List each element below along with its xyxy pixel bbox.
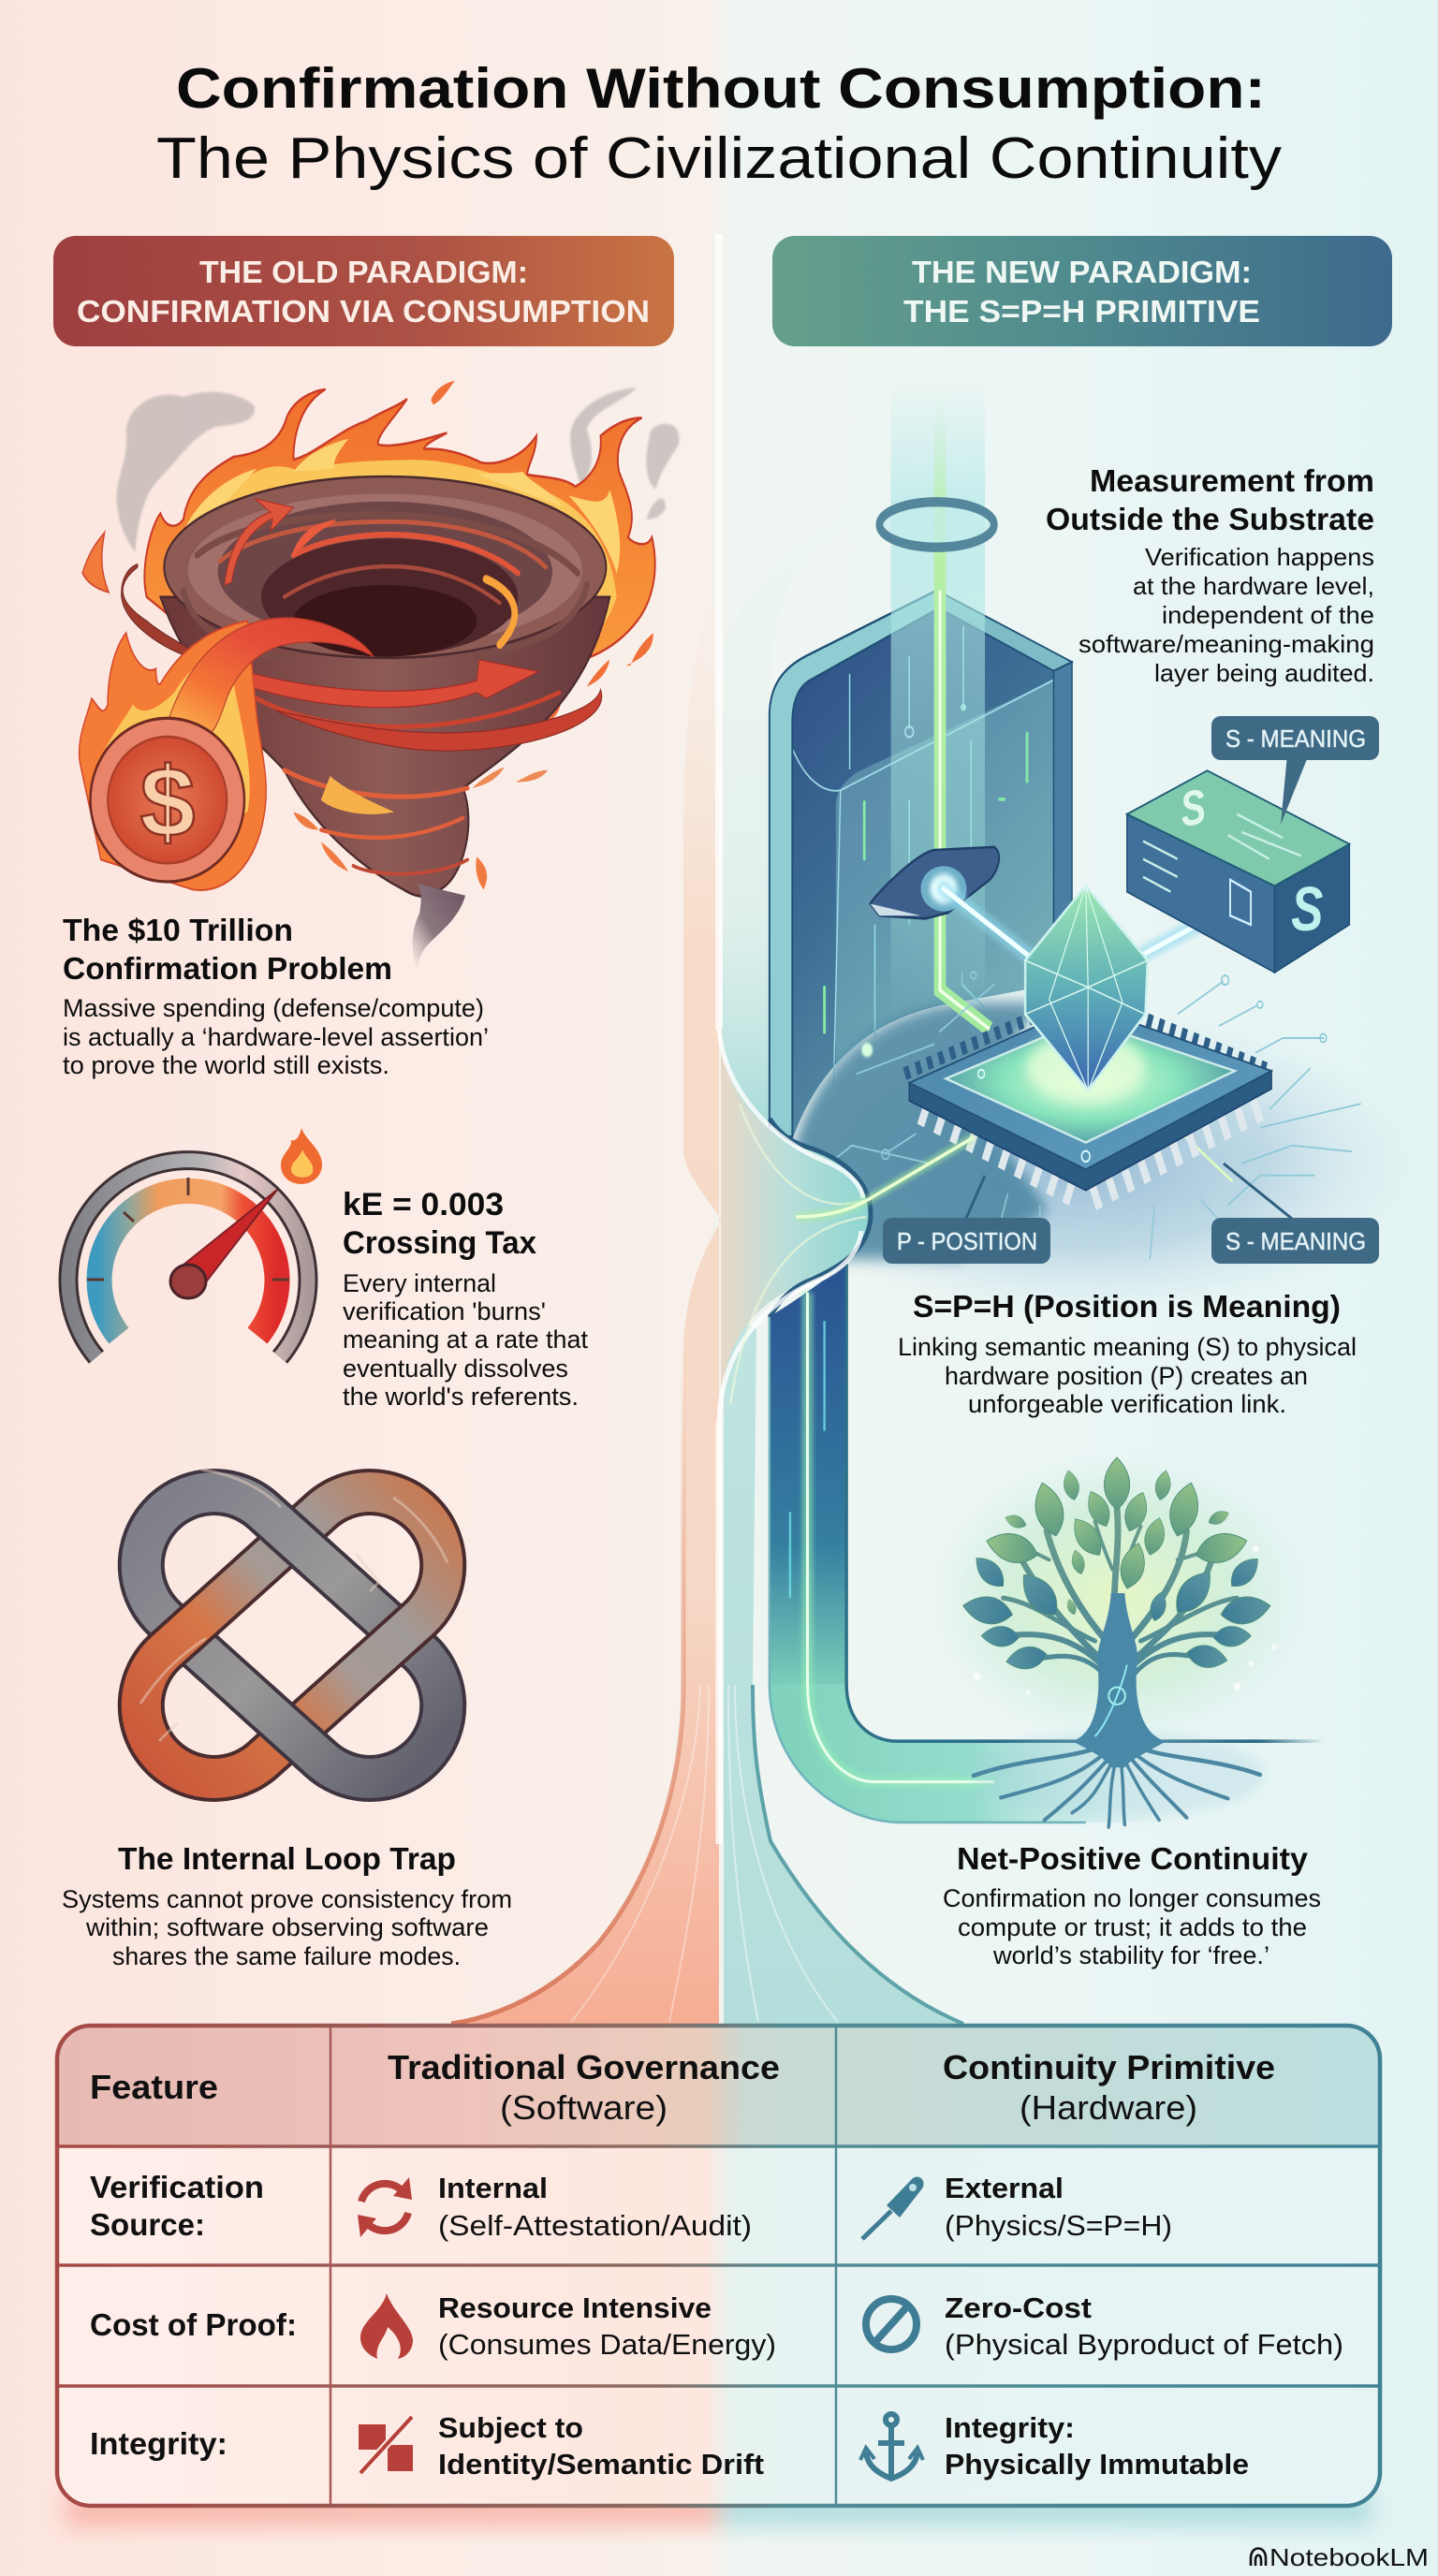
leaves: [961, 1457, 1272, 1673]
icon: crossing tax gauge: [68, 1128, 322, 1357]
row: verification source: (Physics/S=P=H): [945, 2209, 1172, 2242]
icon: semantic drift: [359, 2417, 413, 2473]
text: net-positive continuity: Net-Positive Continuity: [957, 1841, 1309, 1876]
measurement beams: [944, 889, 1244, 958]
text: measurement from outside the substrate: layer being audited.: [1154, 659, 1374, 687]
header: old paradigm: THE OLD PARADIGM:: [199, 255, 528, 289]
text: S=P=H position is meaning: S=P=H (Position is Meaning): [913, 1289, 1341, 1324]
row: cost of proof: Cost of Proof:: [90, 2307, 297, 2342]
text: internal loop trap: Systems cannot prove consistency from: [62, 1885, 512, 1913]
text: measurement from outside the substrate: Verification happens: [1145, 543, 1374, 571]
text: crossing tax: the world's referents.: [343, 1383, 579, 1411]
text: net-positive continuity: compute or trust; it adds to the: [958, 1913, 1307, 1941]
row: verification source: External: [945, 2172, 1064, 2204]
text: internal loop trap: [62, 1841, 512, 1970]
icon: burning tornado with dollar coin: [80, 381, 680, 969]
central stream dividing the two paradigms: [451, 234, 963, 2024]
microchip: [904, 996, 1271, 1199]
sensor eye: [871, 847, 999, 918]
header: new paradigm: THE S=P=H PRIMITIVE: [903, 294, 1260, 329]
header row: Continuity Primitive: [943, 2048, 1275, 2086]
title: The Physics of Civilizational Continuity: [156, 126, 1282, 191]
NotebookLM brand mark: NotebookLM: [1269, 2543, 1429, 2571]
header row: [90, 2048, 1275, 2127]
row: verification source: Source:: [90, 2207, 205, 2242]
text: S=P=H position is meaning: Linking semantic meaning (S) to physical: [898, 1333, 1357, 1361]
text: measurement from outside the substrate: Outside the Substrate: [1046, 502, 1374, 536]
title: Confirmation Without Consumption:: [176, 57, 1266, 120]
text: measurement from outside the substrate: Measurement from: [1090, 463, 1374, 498]
text: net-positive continuity: world’s stability for ‘free.’: [992, 1941, 1269, 1969]
text: net-positive continuity: [943, 1841, 1321, 1969]
title: [156, 57, 1282, 191]
row: verification source: Internal: [438, 2172, 548, 2204]
icon: small flame at gauge tip: [281, 1128, 322, 1184]
header: new paradigm: THE NEW PARADIGM:: [912, 255, 1252, 289]
text: $10 trillion problem: to prove the world still exists.: [63, 1051, 389, 1079]
text: $10 trillion problem: Confirmation Problem: [63, 951, 392, 986]
text: crossing tax: eventually dissolves: [343, 1354, 568, 1383]
text: $10 trillion problem: is actually a ‘hardware-level assertion’: [63, 1023, 489, 1051]
label: P position: P - POSITION: [897, 1227, 1037, 1255]
label: S meaning callout top: [1211, 716, 1379, 825]
circuit traces: [829, 972, 1361, 1259]
row: integrity: Integrity:: [945, 2411, 1075, 2444]
row: cost of proof: (Physical Byproduct of Fetch): [945, 2328, 1343, 2361]
text: S=P=H position is meaning: [898, 1289, 1357, 1418]
illustration: hardware pillar, sensor, S box, crystal and chip: [756, 381, 1416, 1319]
label: S meaning bottom: [1211, 1218, 1379, 1264]
icon: anchor: [860, 2414, 923, 2479]
text: crossing tax: verification 'burns': [343, 1297, 546, 1325]
text: net-positive continuity: Confirmation no longer consumes: [943, 1884, 1321, 1912]
text: $10 trillion problem: Massive spending (defense/compute): [63, 994, 484, 1022]
text: internal loop trap: shares the same failure modes.: [112, 1942, 461, 1970]
crystal: [1025, 886, 1148, 1104]
row: verification source: [90, 2170, 1172, 2242]
row: integrity: Physically Immutable: [945, 2448, 1249, 2481]
text: crossing tax: kE = 0.003: [343, 1187, 504, 1222]
header: new paradigm: [772, 236, 1392, 346]
row: cost of proof: [90, 2291, 1343, 2361]
text: measurement from outside the substrate: software/meaning-making: [1078, 630, 1374, 658]
row: integrity: Integrity:: [90, 2426, 227, 2461]
pillar: [770, 591, 1072, 1139]
label: P position: [883, 1164, 1297, 1264]
text: measurement from outside the substrate: at the hardware level,: [1133, 572, 1374, 600]
label: S meaning callout top: S - MEANING: [1225, 724, 1366, 753]
text: crossing tax: Crossing Tax: [343, 1225, 536, 1261]
row: verification source: Verification: [90, 2170, 264, 2204]
row: cost of proof: Zero-Cost: [945, 2291, 1092, 2324]
S meaning box: S: [1291, 874, 1324, 944]
text: $10 trillion problem: [63, 913, 489, 1079]
S meaning box: S: [1178, 779, 1209, 837]
row: cost of proof: Resource Intensive: [438, 2291, 712, 2324]
pinch where the stream meets the hardware: [719, 1020, 974, 1423]
icon: external probe: [862, 2176, 924, 2239]
text: internal loop trap: within; software observing software: [85, 1913, 489, 1941]
header row: Traditional Governance: [388, 2048, 780, 2086]
text: measurement from outside the substrate: [1046, 463, 1374, 687]
icon: interlocked internal loops: [111, 1462, 473, 1808]
text: crossing tax: [343, 1187, 588, 1411]
comparison table: [57, 2026, 1380, 2527]
text: crossing tax: Every internal: [343, 1269, 496, 1297]
light beam: [891, 381, 990, 1029]
text: measurement from outside the substrate: independent of the: [1162, 601, 1374, 629]
text: $10 trillion problem: The $10 Trillion: [63, 913, 293, 947]
roots: [974, 1741, 1260, 1827]
row: verification source: (Self-Attestation/Audit): [438, 2209, 752, 2242]
icon: dollar sign on coin: $: [140, 747, 195, 857]
header: old paradigm: CONFIRMATION VIA CONSUMPTION: [77, 294, 650, 329]
text: S=P=H position is meaning: hardware position (P) creates an: [945, 1362, 1308, 1390]
header row: (Hardware): [1020, 2088, 1197, 2127]
icon: tree of continuity: [925, 1450, 1311, 1827]
chip floor: [795, 1003, 1049, 1259]
icon: resource flame: [360, 2293, 413, 2359]
icon: internal refresh cycle: [358, 2177, 412, 2237]
row: integrity: Subject to: [438, 2411, 583, 2444]
row: integrity: [90, 2411, 1249, 2481]
S meaning box: [1127, 770, 1349, 973]
pipe channel from pinch to tree: [770, 1264, 1324, 1822]
header: old paradigm: [53, 236, 674, 346]
icon: zero-cost prohibition: [866, 2299, 917, 2349]
label: S meaning bottom: S - MEANING: [1225, 1227, 1366, 1255]
header row: Feature: [90, 2068, 218, 2106]
top ring: [879, 502, 994, 548]
header row: (Software): [500, 2088, 668, 2127]
text: crossing tax: meaning at a rate that: [343, 1325, 588, 1354]
text: S=P=H position is meaning: unforgeable verification link.: [968, 1390, 1286, 1418]
row: cost of proof: (Consumes Data/Energy): [438, 2328, 776, 2361]
text: internal loop trap: The Internal Loop Trap: [118, 1841, 456, 1876]
row: integrity: Identity/Semantic Drift: [438, 2448, 764, 2481]
branches: [1004, 1507, 1237, 1675]
